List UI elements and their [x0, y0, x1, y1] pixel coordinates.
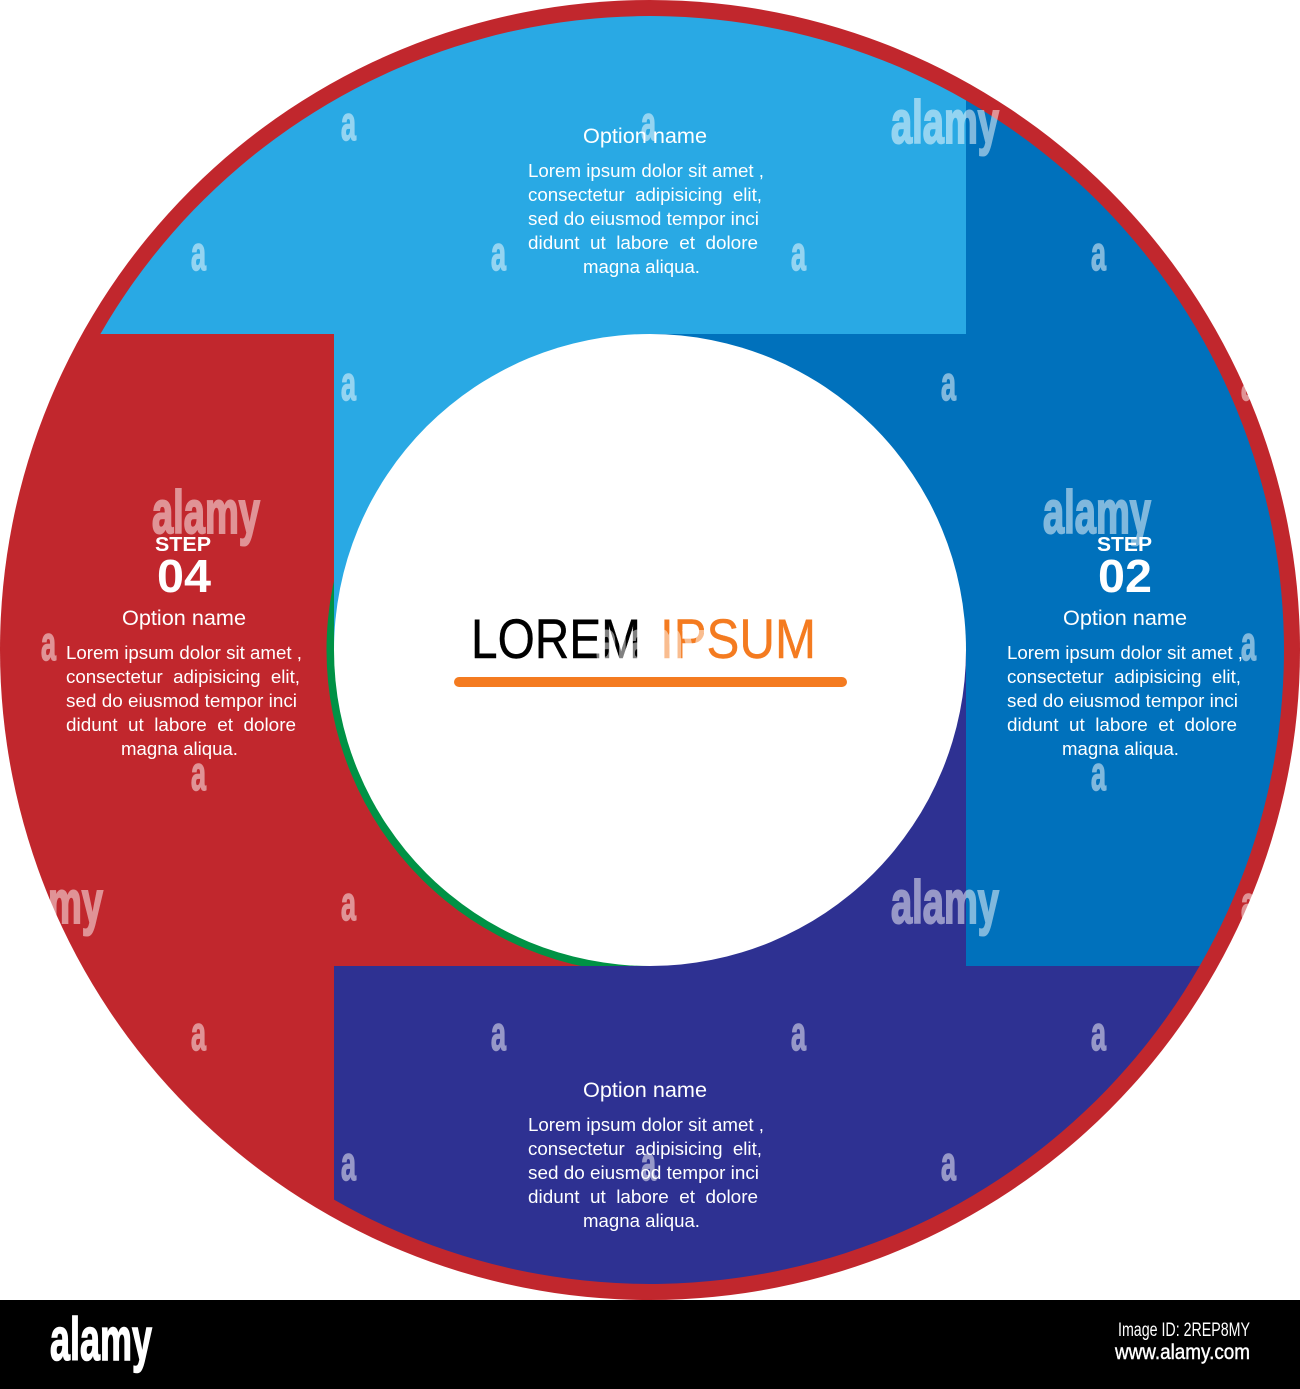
- panel: right dark blue segment: [650, 100, 1284, 966]
- watermark pattern: a: [491, 228, 506, 281]
- panel: top light blue segment: [100, 16, 966, 650]
- text block: step 04: 04: [157, 550, 211, 602]
- watermark pattern: a: [791, 228, 806, 281]
- text block: step 04: didunt ut labore et dolore: [66, 715, 296, 735]
- text block: step 02: didunt ut labore et dolore: [1007, 715, 1237, 735]
- text block: top option: magna aliqua.: [583, 257, 700, 277]
- watermark pattern: a: [341, 878, 356, 931]
- text block: bottom option: Option name: [583, 1079, 707, 1102]
- text block: step 04: consectetur adipisicing elit,: [66, 667, 300, 687]
- watermark pattern: a: [1241, 358, 1256, 411]
- center title: LOREM: [471, 607, 641, 670]
- text block: step 04: STEP: [155, 534, 211, 556]
- footer website: www.alamy.com: [1114, 1341, 1250, 1364]
- text block: step 02: magna aliqua.: [1062, 739, 1179, 759]
- watermark pattern: a: [341, 358, 356, 411]
- panel: bottom navy segment: [334, 650, 1200, 1284]
- text block: bottom option: didunt ut labore et dolore: [528, 1187, 758, 1207]
- watermark pattern: a: [191, 748, 206, 801]
- watermark pattern: a: [41, 618, 56, 671]
- watermark pattern: a: [1091, 748, 1106, 801]
- text block: step 02: consectetur adipisicing elit,: [1007, 667, 1241, 687]
- center title: [471, 607, 816, 670]
- text block: top option: [528, 125, 764, 277]
- watermark pattern: alamy: [891, 89, 999, 156]
- watermark pattern: a: [791, 1008, 806, 1061]
- watermark pattern: a: [641, 98, 656, 151]
- watermark pattern: alamy: [891, 869, 999, 936]
- text block: step 02: 02: [1098, 550, 1152, 602]
- watermark pattern: alamy: [152, 479, 260, 546]
- text block: step 02: sed do eiusmod tempor inci: [1007, 691, 1238, 711]
- text block: top option: Option name: [583, 125, 707, 148]
- text block: step 04: sed do eiusmod tempor inci: [66, 691, 297, 711]
- text block: step 02: STEP: [1097, 534, 1152, 556]
- watermark pattern: alamy: [1043, 479, 1151, 546]
- text block: bottom option: Lorem ipsum dolor sit amet ,: [528, 1115, 764, 1135]
- watermark pattern: a: [491, 1008, 506, 1061]
- text block: bottom option: magna aliqua.: [583, 1211, 700, 1231]
- center title: IPSUM: [660, 607, 816, 670]
- watermark pattern: a: [641, 1138, 656, 1191]
- watermark pattern: alamy: [596, 609, 704, 676]
- watermark pattern: a: [191, 228, 206, 281]
- watermark pattern: alamy: [0, 869, 103, 936]
- title underline: [454, 677, 847, 687]
- watermark pattern: a: [1241, 878, 1256, 931]
- footer black bar: [0, 1300, 1300, 1389]
- text block: step 02: Lorem ipsum dolor sit amet ,: [1007, 643, 1243, 663]
- center white circle: [334, 334, 966, 966]
- text block: step 02: [1007, 534, 1243, 759]
- text block: bottom option: consectetur adipisicing elit,: [528, 1139, 762, 1159]
- footer image id: Image ID: 2REP8MY: [1118, 1320, 1250, 1341]
- watermark pattern: a: [941, 358, 956, 411]
- watermark pattern: a: [341, 98, 356, 151]
- text block: bottom option: [528, 1079, 764, 1231]
- watermark pattern: [0, 89, 1256, 1191]
- watermark pattern: a: [941, 1138, 956, 1191]
- watermark pattern: a: [191, 1008, 206, 1061]
- text block: top option: Lorem ipsum dolor sit amet ,: [528, 161, 764, 181]
- watermark pattern: a: [1241, 618, 1256, 671]
- footer logo: alamy: [50, 1306, 152, 1373]
- text block: bottom option: sed do eiusmod tempor inci: [528, 1163, 759, 1183]
- green inner ring: [326, 326, 974, 974]
- text block: top option: sed do eiusmod tempor inci: [528, 209, 759, 229]
- watermark pattern: a: [1091, 1008, 1106, 1061]
- text block: step 02: Option name: [1063, 607, 1187, 630]
- text block: step 04: [66, 534, 302, 759]
- text block: top option: consectetur adipisicing elit,: [528, 185, 762, 205]
- text block: step 04: Lorem ipsum dolor sit amet ,: [66, 643, 302, 663]
- text block: top option: didunt ut labore et dolore: [528, 233, 758, 253]
- text block: step 04: magna aliqua.: [121, 739, 238, 759]
- watermark pattern: a: [341, 1138, 356, 1191]
- text block: step 04: Option name: [122, 607, 246, 630]
- watermark pattern: a: [1091, 228, 1106, 281]
